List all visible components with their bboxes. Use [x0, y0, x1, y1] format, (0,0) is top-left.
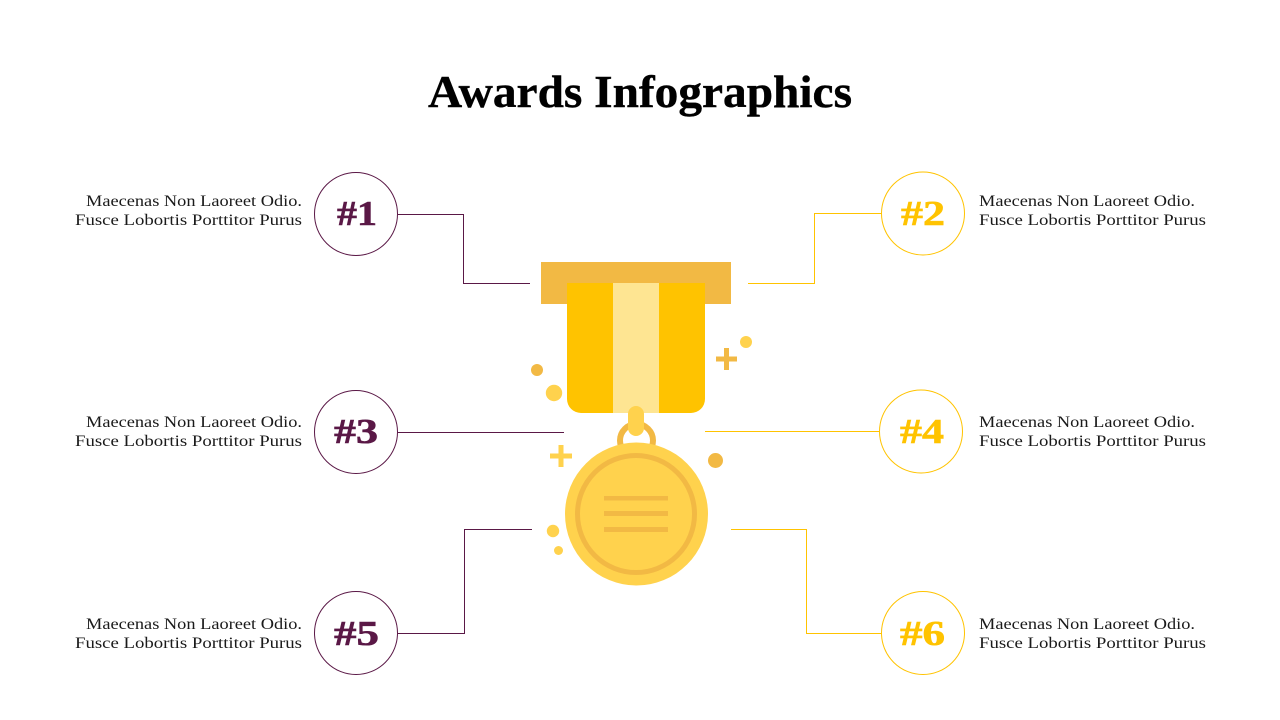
- medal disc: [565, 442, 708, 586]
- title: Awards Infographics: [428, 66, 852, 117]
- sparkle dot: [554, 546, 563, 555]
- text 1: Fusce Lobortis Porttitor Purus: [75, 212, 302, 229]
- award 3: [75, 390, 398, 474]
- ribbon: [567, 283, 705, 413]
- text 3: Maecenas Non Laoreet Odio.: [86, 414, 302, 431]
- number 3: #3: [334, 412, 378, 451]
- sparkle plus: [550, 445, 572, 467]
- medal ring: [620, 424, 653, 457]
- sparkle dot: [740, 336, 752, 348]
- text 5: Maecenas Non Laoreet Odio.: [86, 616, 302, 633]
- number 5: #5: [334, 614, 379, 653]
- text 6: Fusce Lobortis Porttitor Purus: [979, 635, 1206, 652]
- badge 2: [882, 172, 964, 255]
- connector 6: [731, 530, 881, 634]
- sparkle plus: [716, 348, 737, 370]
- connector 2: [748, 214, 881, 284]
- sparkle dot: [547, 525, 559, 537]
- text 4: Fusce Lobortis Porttitor Purus: [979, 433, 1206, 450]
- award 2: [882, 172, 1206, 255]
- text 1: Maecenas Non Laoreet Odio.: [86, 193, 302, 210]
- award 1: [75, 172, 398, 256]
- sparkle dot: [708, 453, 723, 468]
- text 3: Fusce Lobortis Porttitor Purus: [75, 433, 302, 450]
- text 4: Maecenas Non Laoreet Odio.: [979, 414, 1195, 431]
- number 4: #4: [900, 412, 944, 451]
- number 2: #2: [901, 194, 945, 233]
- connector 4: [705, 430, 879, 432]
- award 5: [75, 592, 398, 674]
- badge 4: [880, 390, 962, 473]
- medal pin: [628, 406, 644, 436]
- connector 3: [398, 432, 564, 434]
- badge 6: [882, 592, 964, 674]
- medal illustration: [531, 262, 752, 586]
- text 2: Fusce Lobortis Porttitor Purus: [979, 212, 1206, 229]
- ribbon bar: [541, 262, 731, 304]
- medal lines: [604, 496, 668, 532]
- award 6: [882, 592, 1206, 674]
- number 1: #1: [337, 194, 377, 233]
- text 6: Maecenas Non Laoreet Odio.: [979, 616, 1195, 633]
- badge 3: [314, 390, 398, 474]
- text 5: Fusce Lobortis Porttitor Purus: [75, 635, 302, 652]
- connector 1: [398, 214, 530, 284]
- medal inner ring: [578, 456, 694, 572]
- ribbon centre stripe: [613, 283, 659, 413]
- sparkle dot: [546, 385, 562, 401]
- sparkle dot: [531, 364, 543, 376]
- number 6: #6: [900, 614, 945, 653]
- badge 5: [314, 592, 398, 674]
- badge 1: [314, 172, 398, 256]
- award 4: [880, 390, 1206, 473]
- text 2: Maecenas Non Laoreet Odio.: [979, 193, 1195, 210]
- connector 5: [398, 530, 532, 634]
